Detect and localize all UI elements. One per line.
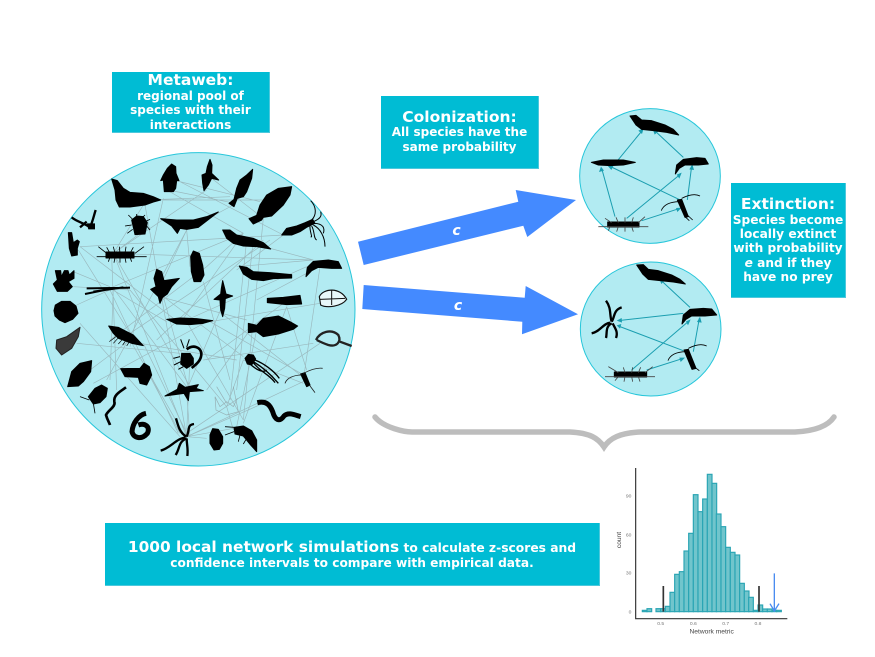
seal mid bbox=[223, 230, 271, 249]
links bbox=[618, 280, 699, 370]
squid bbox=[282, 219, 315, 235]
scallop bbox=[54, 301, 78, 323]
axis labels: 0.8 bbox=[755, 621, 762, 627]
box: extinction: locally extinct bbox=[740, 227, 836, 241]
crab bbox=[181, 353, 193, 368]
seal right bbox=[239, 266, 292, 281]
thin fish bbox=[167, 318, 213, 325]
label c: c bbox=[452, 223, 461, 239]
box: colonization: All species have the bbox=[392, 125, 527, 139]
amphipod bottom bbox=[234, 426, 257, 452]
observed value arrow bbox=[770, 573, 779, 611]
box: extinction: Species become bbox=[733, 213, 843, 227]
network links bbox=[73, 178, 320, 438]
box: metaweb: regional pool of bbox=[137, 89, 244, 103]
tube fish bbox=[267, 295, 302, 305]
confidence markers bbox=[663, 586, 759, 612]
local network circle bottom bbox=[580, 262, 721, 396]
axis labels: 30 bbox=[626, 571, 632, 577]
jellyfish bbox=[245, 354, 256, 365]
thin crustacean bbox=[85, 287, 130, 294]
box: simulations: confidence intervals to compare with empirical data. bbox=[170, 556, 534, 570]
box: metaweb: species with their bbox=[130, 103, 251, 117]
brittle star bbox=[161, 418, 194, 456]
axis labels: 0 bbox=[629, 609, 632, 615]
large fish bbox=[249, 187, 292, 224]
albatross bbox=[214, 281, 233, 317]
species bbox=[592, 265, 717, 382]
bird mid bbox=[151, 269, 179, 303]
starfish bbox=[165, 383, 203, 401]
axes bbox=[636, 468, 787, 619]
box: colonization bbox=[381, 96, 539, 169]
axis labels: 0.6 bbox=[690, 621, 697, 627]
axis labels: 0.7 bbox=[722, 621, 729, 627]
whale slender bbox=[161, 212, 218, 233]
snail outline bbox=[316, 331, 352, 346]
box: metaweb bbox=[112, 72, 270, 133]
histogram: count bbox=[616, 532, 623, 548]
box: simulations bbox=[105, 523, 600, 586]
histogram bbox=[616, 468, 787, 636]
worm thin bbox=[106, 387, 126, 425]
arrow: colonization lower bbox=[362, 285, 578, 334]
arrowheads bbox=[599, 128, 694, 212]
arrowheads bbox=[617, 279, 702, 362]
dark fish bbox=[121, 363, 152, 385]
box: colonization: same probability bbox=[402, 140, 516, 154]
box: extinction: have no prey bbox=[743, 270, 833, 284]
local network circle top bbox=[580, 109, 720, 243]
curly brace bbox=[375, 417, 834, 447]
bars bbox=[642, 474, 781, 612]
axis labels: 90 bbox=[626, 494, 632, 500]
links bbox=[602, 130, 692, 221]
histogram: Network metric bbox=[689, 629, 735, 636]
box: extinction: with probability bbox=[733, 241, 843, 255]
box: extinction: e and if they bbox=[745, 256, 831, 270]
box: extinction bbox=[731, 183, 846, 298]
centipede bbox=[106, 252, 134, 258]
copepod right bbox=[301, 373, 310, 387]
bristle worm bbox=[257, 402, 301, 420]
box: simulations: 1000 local network simulations to calculate z-scores and bbox=[128, 538, 576, 556]
box: colonization: Colonization: bbox=[402, 108, 517, 126]
small ostracod bbox=[88, 385, 107, 404]
oyster bbox=[56, 327, 80, 355]
jellyfish outline bbox=[319, 290, 347, 307]
box: extinction: Extinction: bbox=[741, 195, 835, 213]
pale lobster bbox=[215, 387, 238, 415]
salmon bbox=[229, 169, 253, 207]
species bbox=[591, 115, 708, 232]
silhouettes bbox=[53, 159, 342, 456]
shrimp mid bbox=[109, 326, 143, 346]
penguin mid bbox=[191, 251, 204, 282]
box: metaweb: Metaweb: bbox=[148, 71, 233, 89]
label c: c bbox=[454, 298, 463, 314]
coral bbox=[53, 271, 74, 291]
blob bottom bbox=[210, 429, 223, 450]
perch bbox=[248, 316, 298, 337]
seal large bbox=[112, 179, 161, 207]
kelp bbox=[68, 233, 79, 256]
axis labels: 60 bbox=[626, 532, 632, 538]
box: metaweb: interactions bbox=[150, 118, 231, 132]
penguin bbox=[161, 164, 179, 192]
anemone bbox=[132, 216, 147, 235]
auk bbox=[202, 159, 219, 191]
sea star top left bbox=[72, 210, 96, 227]
krill right bbox=[306, 260, 342, 277]
coiled worm bbox=[132, 413, 148, 438]
seed bbox=[68, 361, 92, 387]
arrow: colonization upper bbox=[358, 190, 576, 265]
axis labels bbox=[626, 494, 762, 627]
metaweb circle bbox=[42, 153, 355, 466]
axis labels: 0.5 bbox=[657, 621, 664, 627]
